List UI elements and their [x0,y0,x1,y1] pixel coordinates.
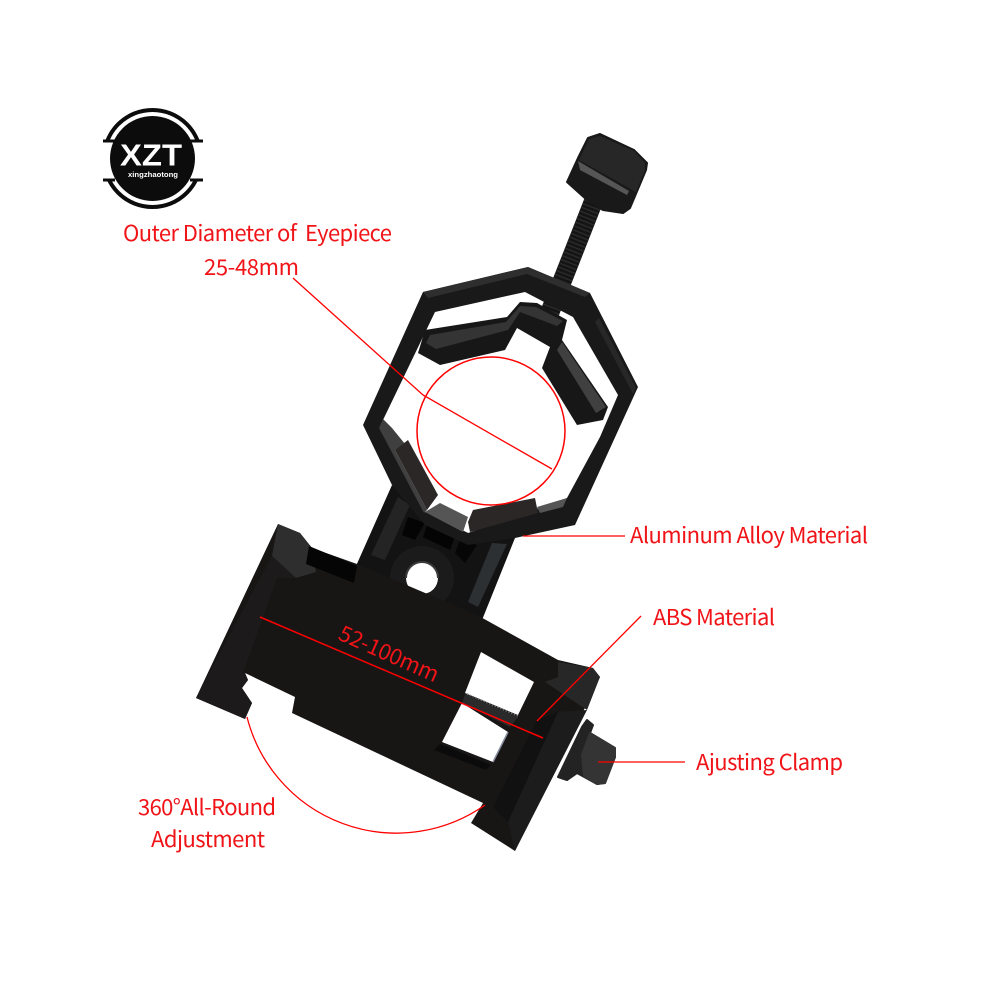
label: outer diameter: 25-48mm [204,250,299,282]
product photo: phone adapter [196,134,647,851]
octagonal eyepiece ring [363,267,638,545]
logo wordmark: XZT [120,138,182,172]
label: rotation: 360°All-Round [138,790,276,822]
threaded screw [550,195,596,312]
leader: adjusting clamp [598,761,685,763]
leader: aluminum alloy [523,535,625,537]
label: ajusting clamp: Ajusting Clamp [696,745,843,777]
label: rotation [138,790,276,854]
adjusting knob [558,720,615,784]
thumb screw head [567,134,647,213]
label: rotation: Adjustment [151,822,265,854]
label: outer diameter: Outer Diameter of Eyepiece [123,216,392,248]
phone clamp body [196,524,600,851]
leader: eyepiece diameter [293,278,552,469]
foam pad: left [395,440,438,510]
label: aluminum alloy: Aluminum Alloy Material [630,518,868,550]
inner clamp piece [418,302,608,425]
support bracket [352,485,515,630]
label: outer diameter [123,216,392,282]
logo: XZT badge [103,110,203,207]
leader: phone width [260,617,543,738]
label: ABS material: ABS Material [653,600,775,632]
logo tagline: xingzhaotong [128,170,178,179]
leader: ABS material [537,616,641,721]
rotation arc [247,717,485,833]
label: phone width: 52-100mm [334,616,445,689]
diameter circle [417,357,565,505]
foam pad: bottom [468,498,538,532]
